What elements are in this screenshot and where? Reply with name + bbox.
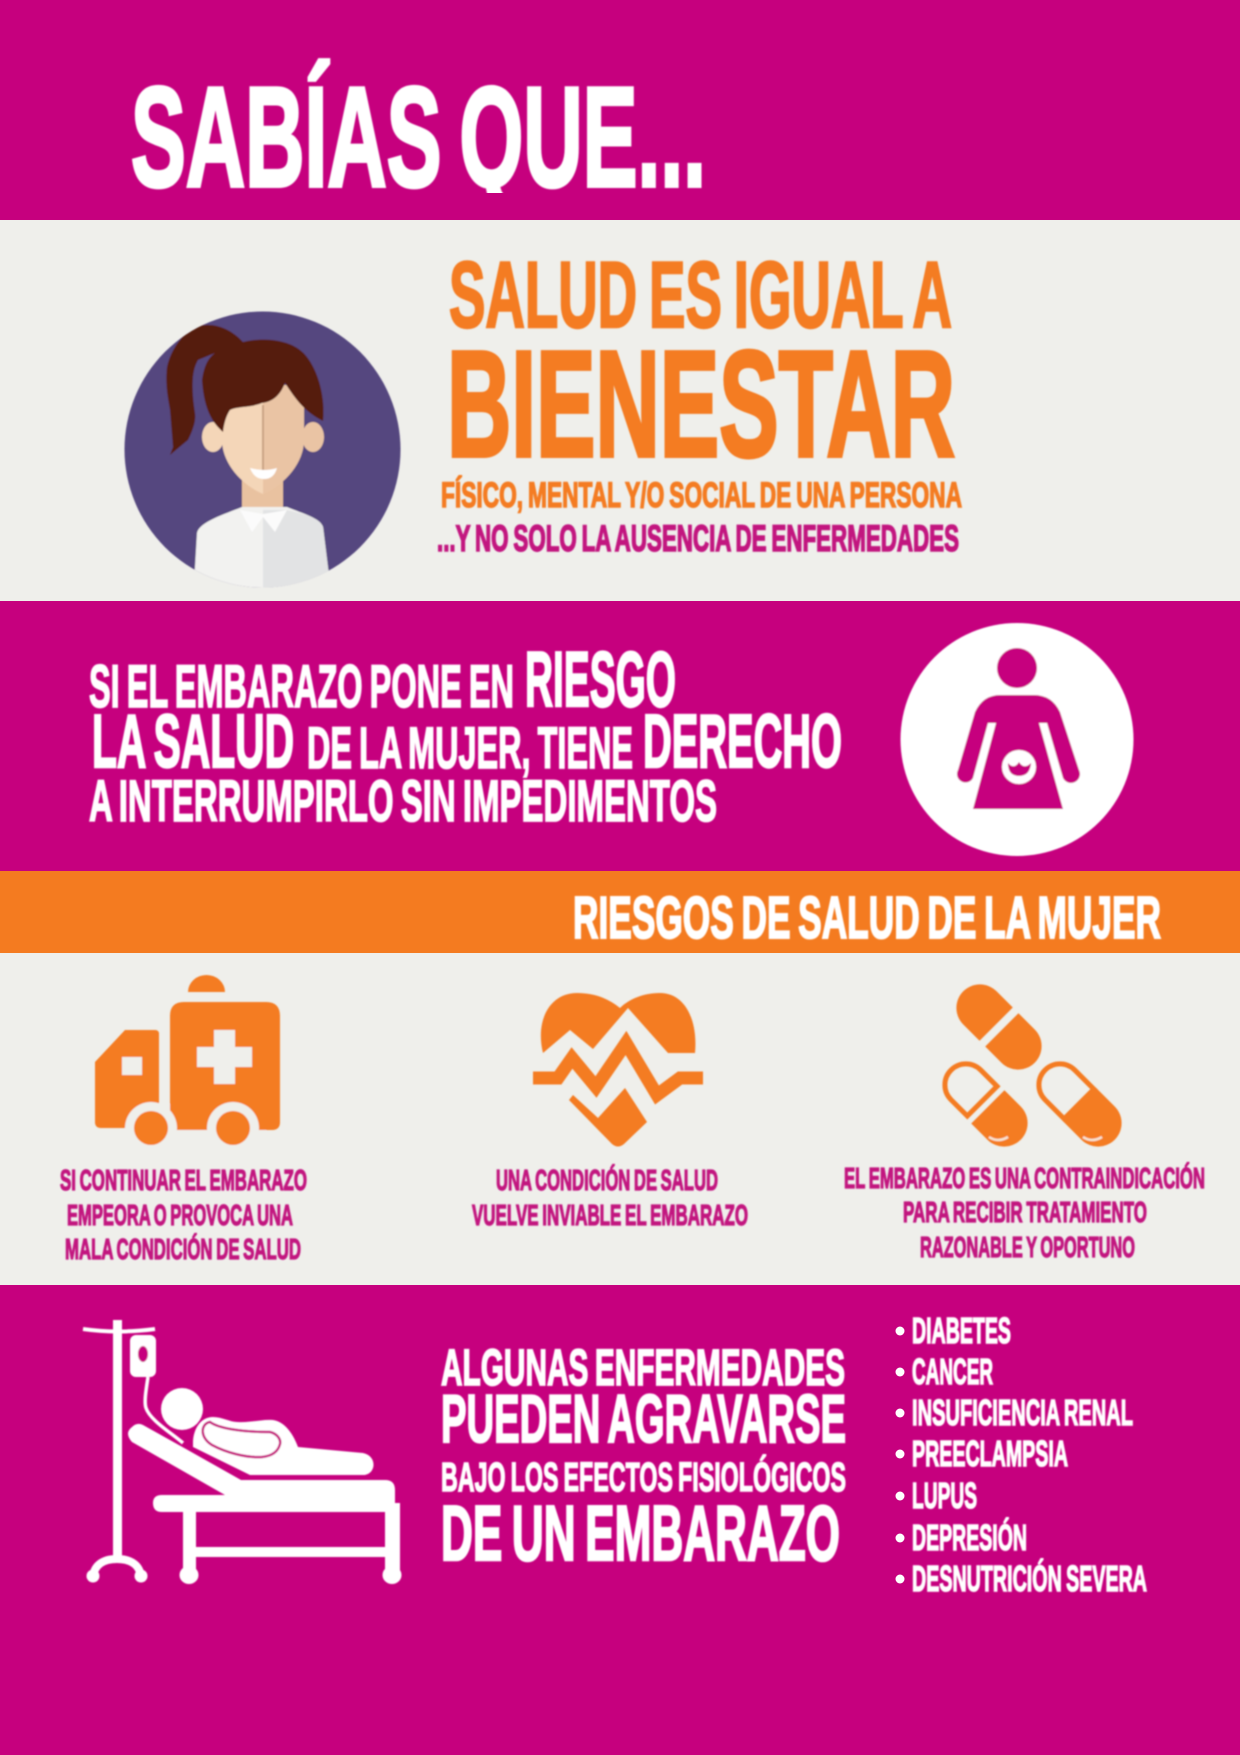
text: algunas enfermedades bbox=[441, 1339, 846, 1577]
list: enfermedades bbox=[896, 1310, 1147, 1599]
list: enfermedades: CANCER bbox=[912, 1351, 993, 1392]
icon: ambulance bbox=[95, 975, 280, 1154]
text: caption ambulance bbox=[60, 1165, 307, 1266]
text: derecho: DERECHO bbox=[643, 699, 842, 783]
panel: riesgos banner bbox=[0, 871, 1240, 953]
text: caption heart: VUELVE INVIABLE EL EMBARAZO bbox=[472, 1200, 748, 1232]
icon: pills bbox=[934, 975, 1131, 1156]
text: caption heart: UNA CONDICIÓN DE SALUD bbox=[496, 1163, 718, 1197]
icon: woman avatar bbox=[124, 312, 400, 600]
panel: riesgo y derecho bbox=[0, 601, 1240, 871]
panel: salud es bienestar bbox=[0, 220, 1240, 601]
panel: enfermedades bbox=[0, 1285, 1240, 1755]
icon: heart with ECG bbox=[533, 993, 703, 1146]
text: de la mujer tiene: DE LA MUJER, TIENE bbox=[307, 716, 633, 781]
list: enfermedades: DEPRESIÓN bbox=[912, 1516, 1027, 1558]
panel: riesgo y derecho: RIESGO bbox=[525, 635, 676, 723]
text: la salud: LA SALUD bbox=[92, 699, 294, 783]
list: enfermedades: PREECLAMPSIA bbox=[912, 1433, 1068, 1474]
text: caption ambulance: SI CONTINUAR EL EMBARAZO bbox=[60, 1165, 307, 1197]
text: si el embarazo pone en: SI EL EMBARAZO PONE EN bbox=[89, 653, 514, 720]
text: algunas enfermedades: PUEDEN AGRAVARSE bbox=[441, 1381, 846, 1457]
title: SABÍAS QUE... bbox=[131, 58, 706, 217]
icon: patient in hospital bed bbox=[83, 1320, 402, 1584]
text: caption heart bbox=[472, 1163, 748, 1232]
text: caption ambulance: EMPEORA O PROVOCA UNA bbox=[67, 1200, 293, 1232]
text: algunas enfermedades: BAJO LOS EFECTOS FISIOLÓGICOS bbox=[441, 1454, 846, 1500]
text: algunas enfermedades: DE UN EMBARAZO bbox=[441, 1489, 840, 1577]
text: a interrumpirlo: A INTERRUMPIRLO SIN IMPEDIMENTOS bbox=[89, 769, 717, 834]
text: caption pills bbox=[844, 1161, 1205, 1264]
panel: riesgos de salud bbox=[0, 953, 1240, 1285]
icon: pregnant woman bbox=[900, 623, 1134, 856]
text: algunas enfermedades: ALGUNAS ENFERMEDADES bbox=[441, 1339, 845, 1396]
text: fisico mental social: FÍSICO, MENTAL Y/O SOCIAL DE UNA PERSONA bbox=[441, 475, 962, 515]
list: enfermedades: LUPUS bbox=[912, 1475, 977, 1516]
list: enfermedades: DIABETES bbox=[912, 1310, 1011, 1351]
text: caption ambulance: MALA CONDICIÓN DE SALUD bbox=[65, 1232, 301, 1266]
